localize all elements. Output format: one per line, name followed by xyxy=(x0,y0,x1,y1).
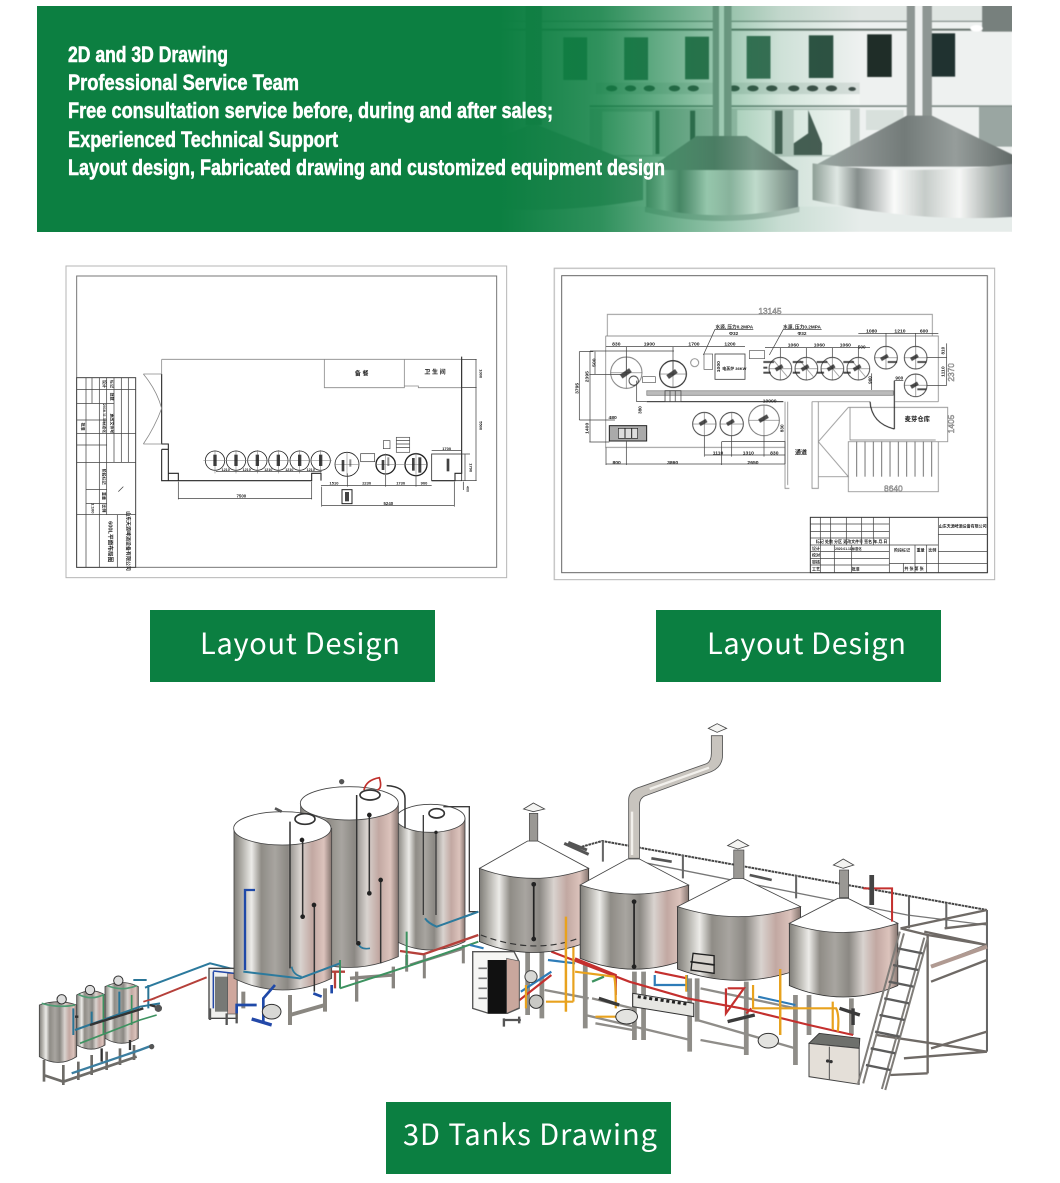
green gradient overlay xyxy=(37,6,1012,232)
equipment blocks: 电蒸炉 36KW xyxy=(722,365,747,371)
support legs and colored pipes xyxy=(470,917,860,1065)
title block: 1:100 xyxy=(91,503,96,514)
tank A xyxy=(234,808,340,992)
dimension lines and values: 600 xyxy=(920,329,928,335)
tank C xyxy=(396,804,478,950)
dimension lines and values: 13145 xyxy=(758,306,782,316)
title block: 标记 处数 分区 更改文件号 签名 年.月.日 xyxy=(816,538,887,544)
dimension lines and values: 1060 xyxy=(814,342,825,348)
dimension lines and numbers: 1000 xyxy=(478,369,483,379)
staircase xyxy=(858,932,928,1090)
title block: 2020.01.11标准化 xyxy=(835,546,862,551)
dimension lines and numbers: 1210 xyxy=(285,468,293,472)
dimension lines and numbers: 1510 xyxy=(330,480,339,485)
title block: 审核 xyxy=(812,558,820,564)
tank C legs xyxy=(407,945,463,978)
dimension lines and values: 830 xyxy=(612,341,621,347)
title block: 标记 xyxy=(109,380,115,388)
dimension lines and numbers: 1210 xyxy=(243,468,251,472)
title block: 比例 xyxy=(102,504,108,512)
fermenter circles xyxy=(205,451,427,476)
title block: 工艺 xyxy=(812,566,820,572)
title block: 重量 xyxy=(917,547,925,553)
dimension lines and values: Φ32 xyxy=(797,331,807,336)
dimension lines and numbers xyxy=(178,369,483,507)
dimension lines and values: 10000 xyxy=(763,399,777,405)
banner photo: brewhouse kettles xyxy=(532,6,1012,232)
title block: 阶段标记 xyxy=(102,469,108,485)
dimension lines and values: 2650 xyxy=(747,460,759,466)
kettle 2 with exhaust duct xyxy=(580,724,727,969)
dimension lines and values: 1900 xyxy=(644,341,655,347)
dimension lines and values: 1080 xyxy=(866,329,877,335)
title block: 更改文件号 xyxy=(109,413,115,433)
dimension lines and numbers: 1210 xyxy=(264,468,272,472)
button: 3D tanks drawing xyxy=(386,1102,671,1174)
yellow riser on kettle 1 xyxy=(562,917,569,1012)
equipment blocks: 通道 xyxy=(795,448,807,456)
dimension lines and values: 2395 xyxy=(584,371,590,382)
dimension lines and numbers: 5240 xyxy=(384,501,394,506)
building outline xyxy=(143,357,477,504)
fermenter crosshairs xyxy=(203,450,427,477)
dimension lines and values: 1200 xyxy=(724,341,736,347)
dimension lines and values: 水源, 压力0.2MPA xyxy=(783,324,821,331)
tank B xyxy=(300,778,405,967)
dimension lines and values: 810 xyxy=(940,346,945,355)
room labels: 备 餐 xyxy=(355,370,368,378)
dimension lines and values: 1210 xyxy=(894,329,906,335)
fermenter labels xyxy=(213,455,449,501)
tank circles xyxy=(611,346,927,436)
title block: 处数 xyxy=(109,393,115,401)
banner: brewery photo with green overlay and service list xyxy=(37,5,1017,232)
service list text: Layout design, Fabricated drawing and customized equipment design xyxy=(68,155,665,180)
dimension lines and numbers: 1730 xyxy=(396,480,406,485)
title block xyxy=(810,517,987,573)
button: layout design left: Layout Design xyxy=(200,621,400,663)
dimension lines and values xyxy=(574,306,956,494)
connecting pipes xyxy=(145,912,478,1000)
dimension lines and values: 1060 xyxy=(788,342,799,348)
dimension lines and values: 1310 xyxy=(743,450,754,456)
title block: 批准 xyxy=(80,423,86,431)
floor plan walls xyxy=(606,314,948,492)
equipment blocks: 麦芽仓库 xyxy=(905,414,931,423)
dimension lines and values: 1400 xyxy=(584,423,590,434)
pump left xyxy=(237,985,332,1025)
title block: 重量 xyxy=(102,492,108,500)
dimension lines and values: Φ32 xyxy=(729,331,739,336)
dimension lines and values: 1060 xyxy=(840,342,851,348)
service list text: Experienced Technical Support xyxy=(68,127,339,152)
manifold pipes xyxy=(332,912,478,988)
button: 3D tanks drawing: 3D Tanks Drawing xyxy=(403,1112,657,1154)
title block: 设计 xyxy=(812,545,820,551)
dimension lines and values: 1110 xyxy=(713,450,723,456)
service list text: Professional Service Team xyxy=(68,70,299,95)
title block: 共 张 第 张 xyxy=(904,565,924,571)
dimension lines and values: 380 xyxy=(638,406,643,414)
dimension lines and numbers: 900 xyxy=(421,480,428,485)
dimension lines and values: 480 xyxy=(609,415,617,421)
button: layout design left xyxy=(150,610,435,682)
button: layout design right xyxy=(656,610,941,682)
dimension lines and values: 3795 xyxy=(574,383,580,394)
equipment blocks xyxy=(609,351,931,456)
dimension lines and numbers: 1790 xyxy=(468,463,473,473)
plate heat exchanger xyxy=(473,952,521,1027)
service list text: 2D and 3D Drawing xyxy=(68,42,228,67)
small tanks group xyxy=(39,976,162,1085)
dimension lines and values: 1000 xyxy=(716,361,722,372)
dimension lines and values: 1405 xyxy=(946,414,956,433)
dimension lines and values: 500 xyxy=(858,345,866,350)
dimension lines and numbers: 2230 xyxy=(362,480,372,485)
room labels xyxy=(355,368,446,378)
tank B legs xyxy=(350,967,393,1002)
dimension lines and numbers: 400 xyxy=(466,486,470,492)
dimension lines and values: 830 xyxy=(770,450,779,456)
title block xyxy=(77,378,136,571)
3D drawing: storage tanks and small tanks xyxy=(39,778,478,1085)
title block: 山东天源啤酒设备有限公司 xyxy=(939,522,987,528)
dimension lines and numbers: 7500 xyxy=(237,494,247,499)
panel: right layout drawing xyxy=(554,268,995,580)
room labels: 卫 生 间 xyxy=(424,368,446,376)
title block: 比例 xyxy=(928,547,936,553)
dimension lines and numbers: 1210 xyxy=(222,468,230,472)
dimension lines and numbers: 1700 xyxy=(442,446,452,451)
dimension lines and values: 8640 xyxy=(884,484,903,494)
dimension lines and numbers: 1210 xyxy=(307,468,315,472)
button: layout design right: Layout Design xyxy=(707,621,906,663)
3D drawing: brewhouse xyxy=(470,724,987,1090)
title block: 设计 xyxy=(102,380,108,388)
dimension lines and values: 830 xyxy=(779,424,784,432)
dimension lines and values: 500 xyxy=(592,358,598,367)
tank A legs xyxy=(243,988,325,1025)
panel: left layout drawing xyxy=(66,266,507,578)
control cabinet xyxy=(809,1033,860,1084)
platform frame xyxy=(877,910,987,1075)
dimension lines and values: 水源, 压力0.2MPA xyxy=(715,324,754,331)
tank inner rings and crosshairs xyxy=(611,346,927,436)
title block: 阶段标记 xyxy=(894,547,910,553)
service list text xyxy=(68,42,665,180)
dimension lines and values: 3860 xyxy=(667,460,678,466)
kettle 1 with chimney xyxy=(479,803,589,952)
back railing xyxy=(582,841,987,1052)
dimension lines and values: 2370 xyxy=(946,363,956,382)
title block: 2018.11.16标准化 xyxy=(102,404,107,433)
dimension lines and numbers: 5500 xyxy=(478,421,483,431)
tank labels xyxy=(620,354,927,426)
service list text: Free consultation service before, during and after sales; xyxy=(68,98,553,123)
title block: 山东天源啤酒设备有限公司 xyxy=(124,511,131,571)
manifold and pumps xyxy=(525,971,778,1048)
title block: 校对 xyxy=(812,552,820,558)
plate heat exchanger left xyxy=(209,968,243,1025)
title block: 600L平面布局图 xyxy=(106,521,114,563)
dimension lines and values: 960 xyxy=(868,376,873,384)
kettle 3 xyxy=(651,840,801,1035)
dimension lines and values: 1700 xyxy=(688,341,700,347)
title block: 批准 xyxy=(852,566,860,572)
dimension lines and values: 800 xyxy=(613,460,621,466)
dimension lines and values: 1110 xyxy=(940,366,946,377)
dimension lines and values: 900 xyxy=(895,375,904,380)
kettle 4 xyxy=(789,859,898,997)
